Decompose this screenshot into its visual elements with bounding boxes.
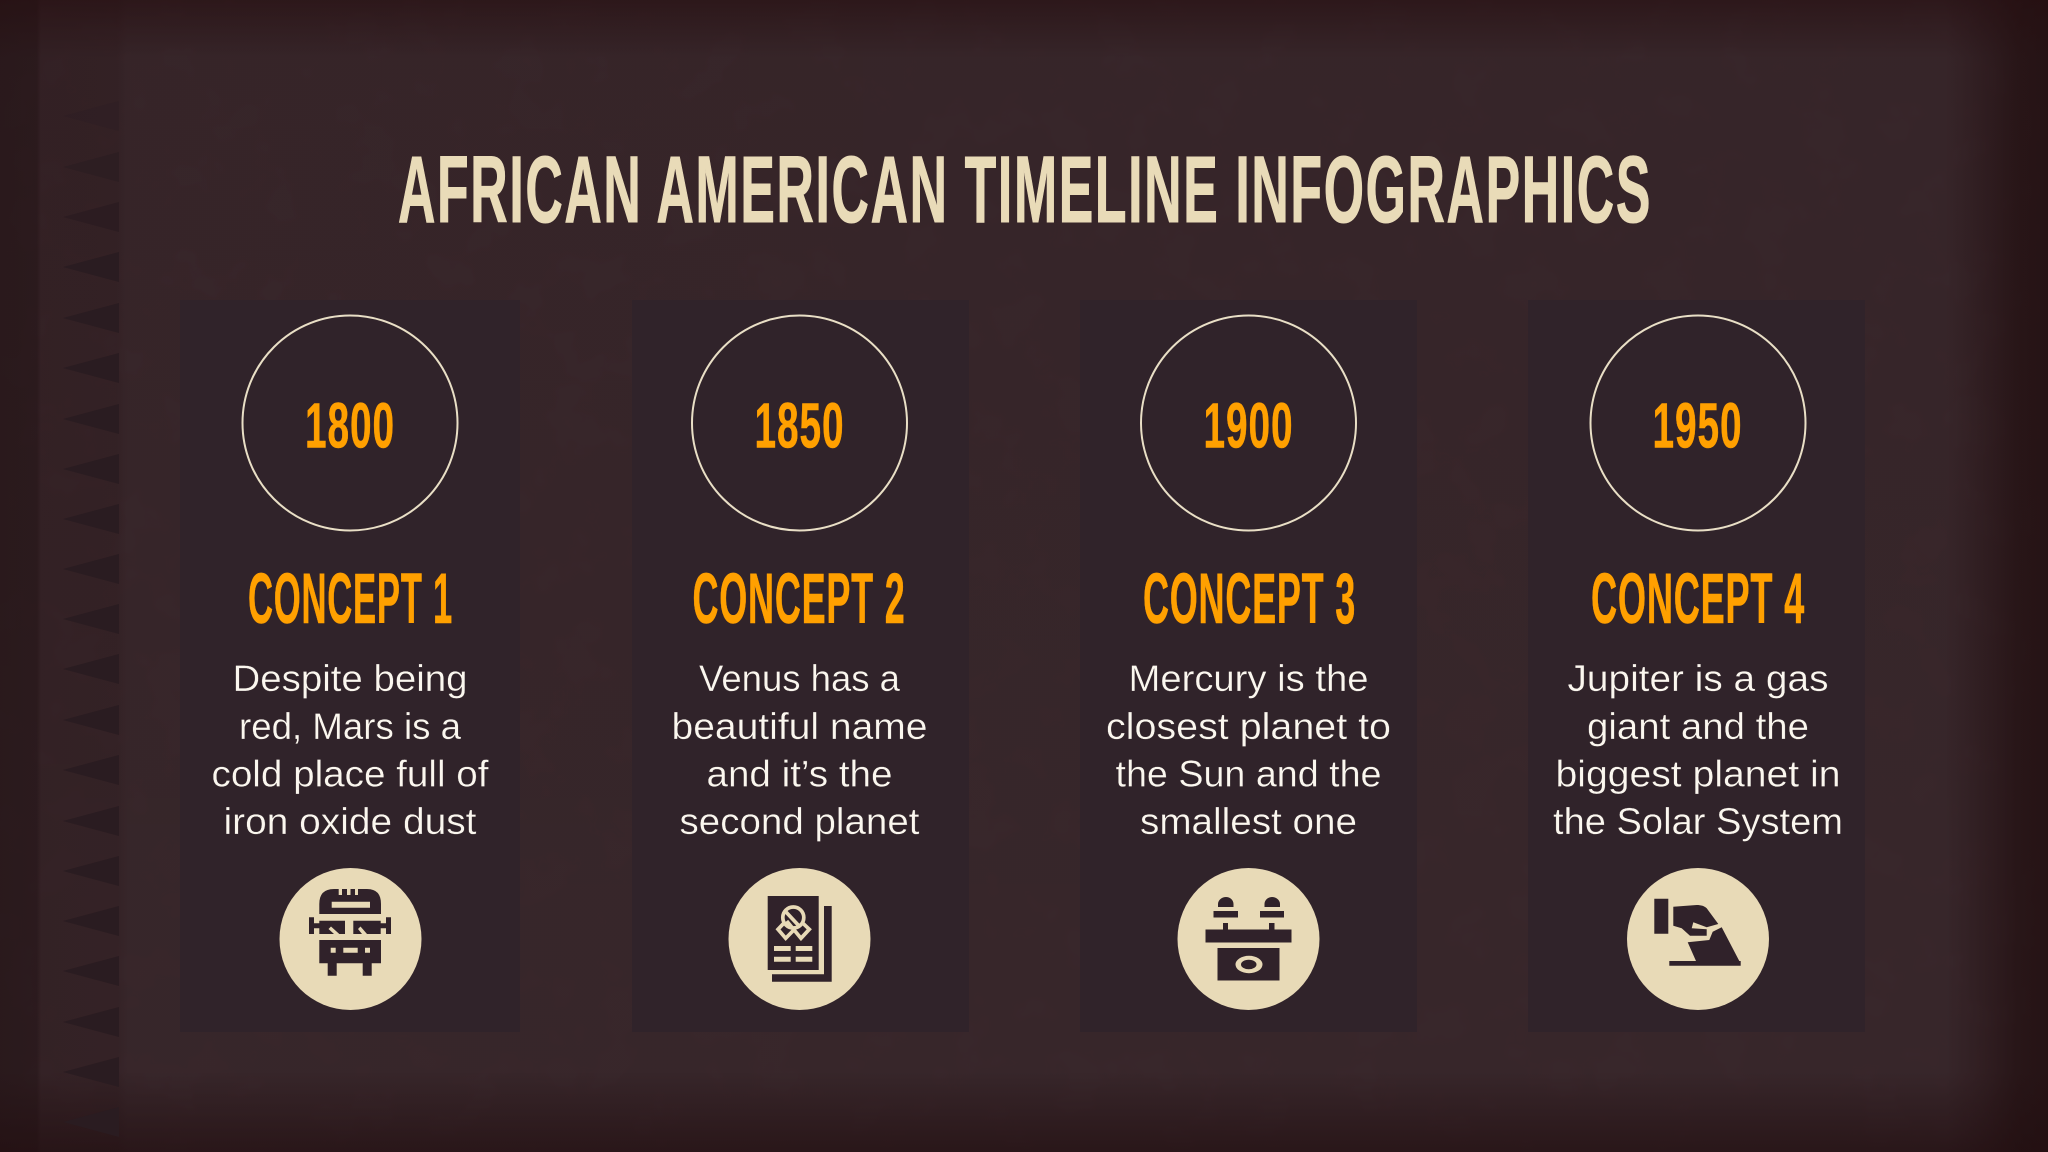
- description: concept 3: smallest one: [1140, 801, 1357, 842]
- icon: hand on statue: [1627, 868, 1769, 1010]
- panel: concept 4: [1528, 300, 1865, 1032]
- icon: ribbon document: [728, 868, 870, 1010]
- description: concept 1: cold place full of: [212, 754, 489, 794]
- year circle 1950: 1950: [1652, 390, 1742, 462]
- decorative triangle border: [63, 101, 119, 1137]
- card background: [1080, 300, 1417, 1032]
- description: concept 1: Despite being: [232, 658, 468, 699]
- heading: concept 2: CONCEPT 2: [692, 560, 906, 639]
- year circle 1900: 1900: [1204, 390, 1294, 462]
- description: concept 2: and it’s the: [706, 754, 892, 794]
- year circle 1800: 1800: [305, 390, 395, 462]
- card background: [632, 300, 969, 1032]
- description: concept 1: iron oxide dust: [224, 801, 477, 842]
- panel: concept 1: CONCEPT 1: [248, 560, 453, 639]
- description: concept 4: Jupiter is a gas: [1568, 658, 1828, 699]
- description: concept 4: the Solar System: [1553, 801, 1843, 842]
- card background: [1528, 300, 1865, 1032]
- panel: concept 1: [180, 300, 520, 1032]
- description: concept 3: [1106, 658, 1391, 842]
- year circle 1800: [242, 316, 458, 530]
- year circle 1850: 1850: [754, 390, 844, 462]
- card background: [180, 300, 520, 1032]
- description: concept 2: second planet: [680, 801, 920, 842]
- panel: concept 2: [632, 300, 969, 1032]
- year circle 1950: [1590, 316, 1806, 530]
- heading: concept 3: CONCEPT 3: [1143, 560, 1356, 639]
- description: concept 4: giant and the: [1587, 706, 1809, 747]
- description: concept 1: red, Mars is a: [239, 706, 461, 747]
- description: concept 3: the Sun and the: [1116, 754, 1382, 794]
- year circle 1850: [692, 316, 907, 530]
- description: concept 4: [1553, 658, 1843, 842]
- year circle 1900: [1141, 316, 1356, 530]
- description: concept 4: biggest planet in: [1556, 754, 1840, 794]
- description: concept 2: [672, 658, 928, 842]
- description: concept 2: beautiful name: [672, 706, 928, 747]
- icon: robot mask: [280, 868, 422, 1010]
- description: concept 3: Mercury is the: [1128, 658, 1368, 699]
- icon: lecture desk: [1178, 868, 1320, 1010]
- description: concept 2: Venus has a: [699, 658, 900, 699]
- description: concept 3: closest planet to: [1106, 706, 1391, 747]
- panel: concept 3: [1080, 300, 1417, 1032]
- description: concept 1: [212, 658, 489, 842]
- heading: concept 4: CONCEPT 4: [1591, 560, 1805, 639]
